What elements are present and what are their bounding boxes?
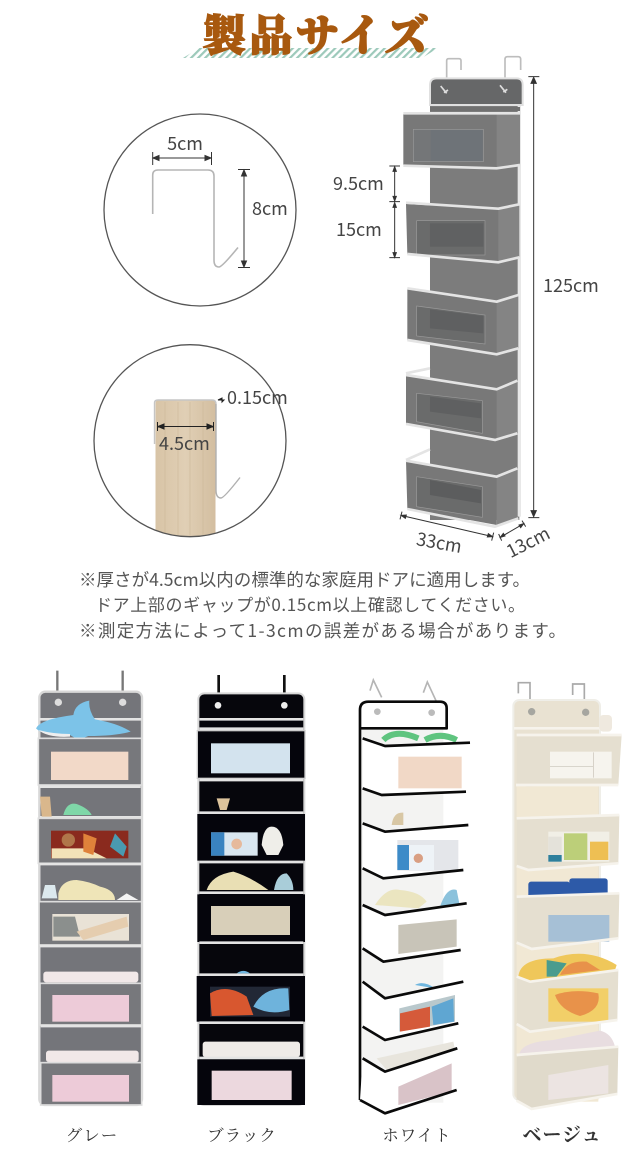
pocket 3	[363, 889, 467, 962]
text block: usage notes	[79, 567, 566, 643]
arrow: door thickness	[158, 422, 214, 431]
pocket 5	[360, 1042, 457, 1113]
pocket 3	[407, 288, 518, 354]
text block: usage notes: ※厚さが4.5cm以内の標準的な家庭用ドアに適用します。	[79, 567, 530, 592]
pocket 1	[516, 735, 622, 787]
label: grey: グレー	[66, 1122, 118, 1146]
icon: hooks	[447, 57, 521, 77]
icon: door hook	[153, 170, 238, 267]
cushion toy	[58, 880, 115, 900]
panel: door fit circle	[94, 345, 286, 540]
header panel	[430, 78, 523, 105]
label: beige: ベージュ	[522, 1120, 602, 1147]
label: 125cm: 125cm	[543, 272, 599, 298]
label: 0.15cm: 0.15cm	[227, 384, 288, 410]
pocket 4	[363, 982, 463, 1040]
panel: grey variant	[36, 671, 142, 1105]
panel: black variant	[197, 675, 305, 1105]
pocket 2	[406, 203, 519, 262]
pocket 2	[363, 813, 468, 878]
arrow: hook height	[238, 170, 250, 268]
label: white: ホワイト	[382, 1122, 452, 1146]
dolphin toy	[36, 701, 131, 740]
label: 33cm: 33cm	[414, 525, 464, 559]
pocket 4	[517, 954, 618, 1032]
pocket 4	[406, 368, 517, 440]
label: black: ブラック	[207, 1122, 277, 1146]
arrow: pocket height	[389, 203, 400, 258]
arrow: total height	[528, 77, 539, 518]
pocket 1	[403, 113, 520, 168]
pocket 2	[517, 815, 619, 870]
arrow: pocket gap	[389, 166, 400, 202]
panel: white variant	[360, 680, 470, 1113]
panel: main grey organizer with dimensions	[389, 57, 539, 541]
arrow: width	[400, 512, 494, 541]
text block: usage notes: ドア上部のギャップが0.15cm以上確認してください。	[95, 591, 525, 616]
label: 5cm: 5cm	[167, 130, 203, 156]
arrow: gap	[218, 398, 224, 402]
grommets	[441, 85, 507, 93]
pocket 1	[363, 734, 470, 795]
text block: usage notes: ※測定方法によって1-3cmの誤差がある場合があります。	[79, 618, 566, 643]
diapers	[43, 972, 138, 982]
back panel	[430, 103, 519, 520]
title: product size: 製品サイズ	[203, 3, 428, 64]
bottle	[599, 715, 612, 732]
label: 13cm: 13cm	[502, 520, 554, 564]
giraffe toy	[217, 798, 230, 810]
arrow: depth	[499, 521, 526, 541]
label: 4.5cm: 4.5cm	[159, 430, 210, 456]
pocket 3	[517, 878, 619, 949]
label: 15cm: 15cm	[336, 216, 382, 242]
giraffe and frog toys	[40, 797, 52, 817]
label: 8cm: 8cm	[252, 195, 288, 221]
pocket 5	[517, 1031, 618, 1109]
pocket 5	[406, 449, 518, 527]
panel: hook dimensions circle	[104, 114, 296, 306]
panel: beige variant	[513, 683, 622, 1109]
label: 9.5cm: 9.5cm	[333, 170, 384, 196]
arrow: hook width	[153, 152, 212, 165]
book and doll	[211, 827, 283, 856]
